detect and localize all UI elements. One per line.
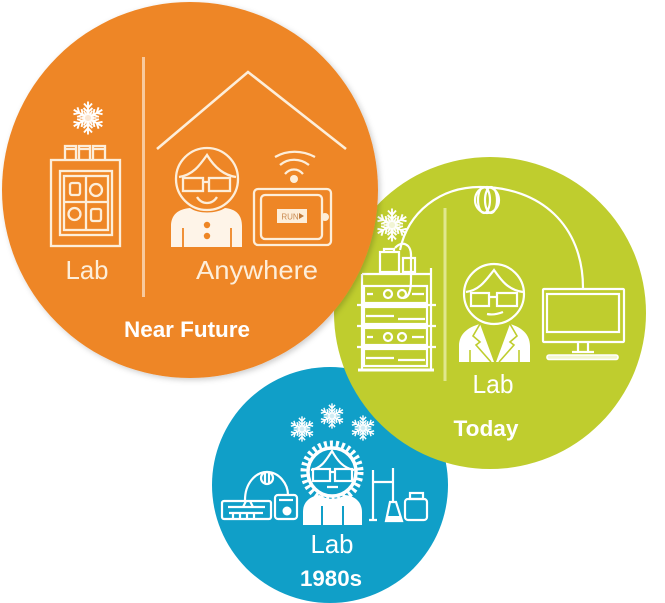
- icon: wifi signal: [275, 152, 315, 183]
- divider: Near Future: [142, 57, 145, 297]
- divider: Today: [444, 208, 446, 381]
- icon: lab stand with flask: [369, 468, 402, 521]
- label: Near Future: Near Future: [124, 317, 250, 342]
- icon: lab device: [51, 146, 120, 246]
- icon: scientist in lab coat: [459, 264, 530, 362]
- icon: tablet: [254, 189, 331, 245]
- icon: equipment rack: [357, 244, 436, 370]
- label: Anywhere: Anywhere: [196, 255, 318, 285]
- icon: snowflake: [375, 208, 409, 242]
- label: 1980s: 1980s: [300, 566, 362, 591]
- icon: scientist in parka: [303, 444, 362, 525]
- panel: 1980s circle: [212, 367, 448, 603]
- label: Lab: Lab: [472, 369, 514, 399]
- icon: tablet: RUN: [281, 212, 299, 222]
- icon: scientist: [171, 148, 242, 247]
- icon: house roof: [157, 72, 346, 149]
- panel: Today circle: [334, 157, 646, 469]
- icon: old instruments with coil: [222, 472, 297, 519]
- label: Lab: Lab: [310, 529, 354, 559]
- icon: fibre cable with coil: [400, 187, 583, 288]
- icon: computer monitor: [543, 289, 624, 360]
- panel: Near Future circle: [2, 2, 378, 378]
- icon: jar: [405, 493, 427, 520]
- label: Today: Today: [454, 416, 519, 441]
- label: Lab: Lab: [66, 255, 108, 285]
- icon: snowflake: [71, 102, 105, 134]
- icon: three snowflakes: [289, 403, 376, 442]
